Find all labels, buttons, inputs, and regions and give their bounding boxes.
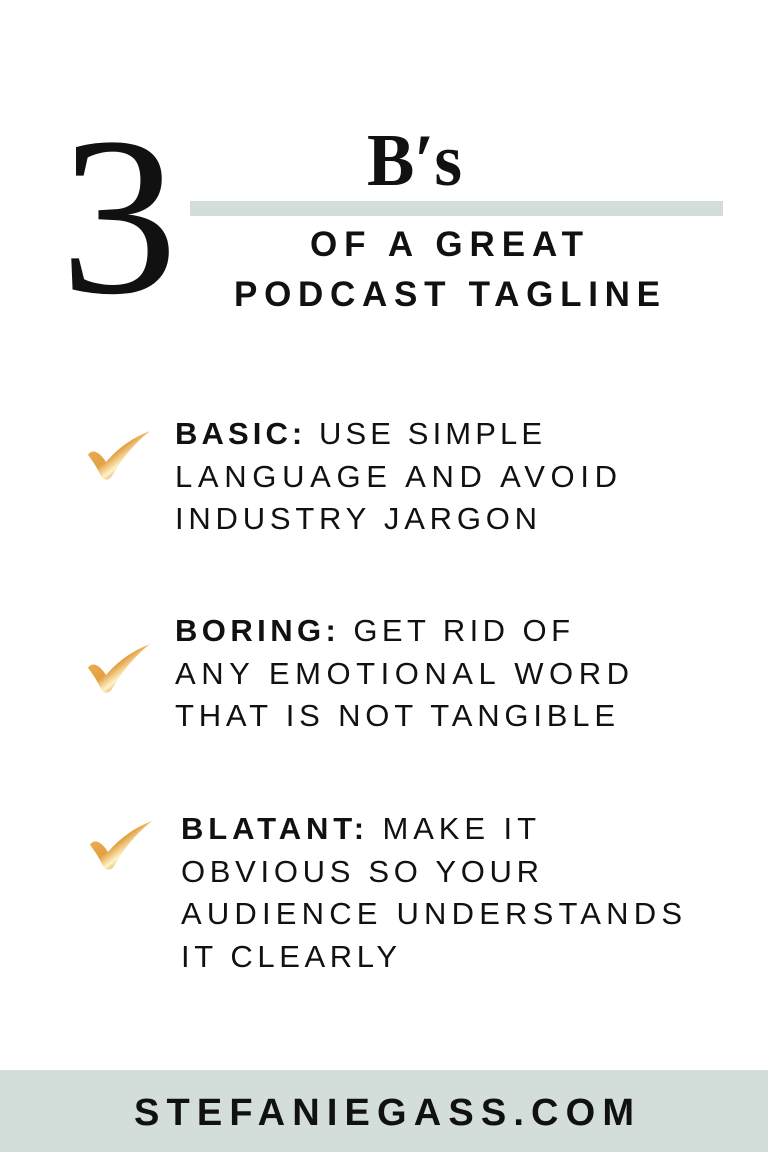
item: boring: BORING: GET RID OF — [175, 613, 570, 648]
item: basic — [88, 416, 617, 536]
title: B's: B′s — [367, 120, 462, 202]
item: boring: THAT IS NOT TANGIBLE — [175, 698, 615, 733]
subtitle: OF A GREAT — [310, 225, 583, 264]
subtitle: PODCAST TAGLINE — [234, 275, 660, 314]
item: blatant: OBVIOUS SO YOUR — [181, 854, 539, 889]
item: blatant — [90, 811, 682, 974]
footer text: STEFANIEGASS.COM — [134, 1092, 634, 1134]
subtitle — [234, 225, 660, 314]
item: blatant: IT CLEARLY — [181, 939, 397, 974]
item: basic: INDUSTRY JARGON — [175, 501, 537, 536]
item: basic: BASIC: USE SIMPLE — [175, 416, 542, 451]
title underline bar — [190, 201, 723, 216]
item: boring: ANY EMOTIONAL WORD — [175, 656, 629, 691]
footer band — [0, 1070, 768, 1152]
icon: checkmark 2 — [88, 644, 150, 693]
title: number 3: 3 — [60, 91, 178, 341]
item: boring — [88, 613, 629, 733]
icon: checkmark 3 — [90, 821, 152, 870]
item: blatant: AUDIENCE UNDERSTANDS — [181, 896, 682, 931]
icon: checkmark 1 — [88, 431, 150, 480]
item: blatant: BLATANT: MAKE IT — [181, 811, 536, 846]
item: basic: LANGUAGE AND AVOID — [175, 459, 617, 494]
